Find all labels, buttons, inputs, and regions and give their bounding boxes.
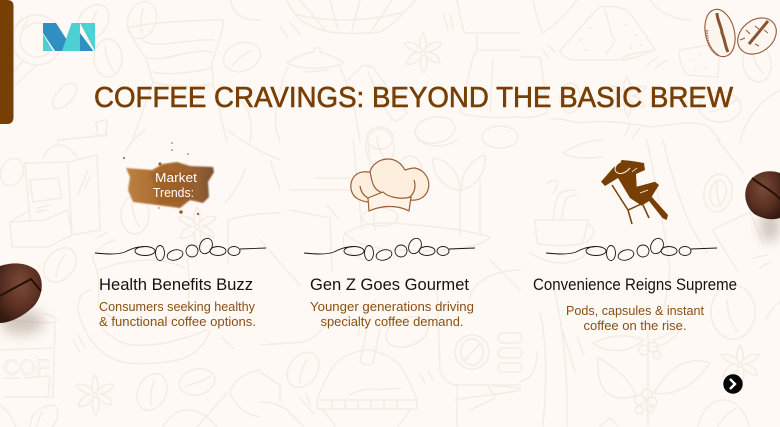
illustration: sketched coffee beans <box>700 6 780 62</box>
decorative squiggle divider <box>304 236 475 262</box>
left brown tab <box>0 0 14 124</box>
icon: coffee stain badge: Trends: <box>153 185 194 200</box>
heading: Health Benefits Buzz: Health Benefits Buzz <box>99 275 253 294</box>
coffee bean: left <box>0 263 44 335</box>
icon: coffee stain badge: Market <box>155 170 197 185</box>
column 3: convenience <box>533 160 737 333</box>
background doodle pattern: COF <box>3 355 49 380</box>
next arrow button <box>723 374 743 394</box>
icon: reclining person <box>601 160 668 224</box>
icon: chef hat <box>351 159 429 211</box>
decorative squiggle divider <box>546 236 717 262</box>
heading: Convenience Reigns Supreme: Convenience Reigns Supreme <box>533 275 737 294</box>
heading: Gen Z Goes Gourmet: Gen Z Goes Gourmet <box>310 275 469 294</box>
body: gen z: specialty coffee demand. <box>320 315 464 329</box>
body: gen z: Younger generations driving <box>310 300 474 314</box>
decorative squiggle divider <box>95 236 266 262</box>
coffee bean: right <box>745 171 780 242</box>
body: health benefits: Consumers seeking healthy <box>99 300 256 314</box>
title: COFFEE CRAVINGS: BEYOND THE BASIC BREW <box>94 82 733 114</box>
icon: coffee stain badge <box>123 142 214 215</box>
body: convenience: Pods, capsules & instant <box>566 304 705 318</box>
body: convenience: coffee on the rise. <box>584 319 686 333</box>
logo <box>43 23 95 51</box>
column 1: market trends <box>95 142 266 329</box>
column 2: gen z <box>304 159 475 329</box>
body: health benefits: & functional coffee options. <box>99 315 256 329</box>
